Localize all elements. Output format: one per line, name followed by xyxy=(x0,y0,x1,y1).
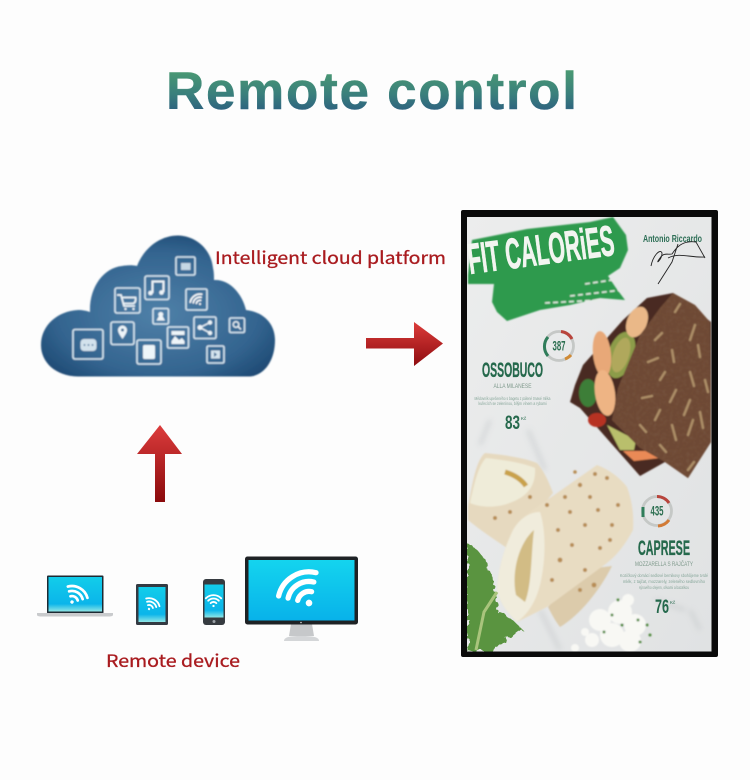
dish: Ossobuco: Mědovník upečeného s bagetu z pálené tmavé mlíka xyxy=(474,396,551,401)
dish: Ossobuco xyxy=(474,359,551,434)
marble background xyxy=(467,217,712,652)
signature xyxy=(651,242,705,284)
gauge: 435: 435 xyxy=(650,502,664,518)
dish: Caprese xyxy=(620,537,708,618)
icon: phone xyxy=(203,579,225,625)
dish: Ossobuco: Kč xyxy=(521,416,527,421)
icon: chat xyxy=(73,330,103,359)
filling xyxy=(579,303,660,461)
icon: monitor xyxy=(245,556,358,641)
title: Remote control xyxy=(166,62,577,121)
icon: calendar xyxy=(176,257,195,275)
icon: search xyxy=(230,318,244,332)
lower tortilla xyxy=(548,566,612,627)
panel: digital signage display xyxy=(461,210,718,657)
food: wraps xyxy=(468,453,633,627)
gauge: 435 xyxy=(642,496,672,526)
icon: shopping cart xyxy=(115,288,140,313)
dish: Caprese: sýrového olejem, olivami a bazalkou xyxy=(639,585,689,590)
arrow: devices to cloud xyxy=(137,425,182,502)
back wrap xyxy=(468,453,553,550)
front wrap xyxy=(497,465,633,622)
icon: laptop xyxy=(37,576,113,616)
gauge: 387: 387 xyxy=(552,338,566,354)
icon: person xyxy=(153,308,168,324)
food: dill xyxy=(467,543,521,651)
dish: Ossobuco: OSSOBUCO xyxy=(482,359,543,382)
icon: tablet xyxy=(136,584,168,625)
dish: Ossobuco: ALLA MILANESE xyxy=(494,383,532,390)
top slice xyxy=(612,293,711,478)
arrow: cloud to display xyxy=(366,322,443,366)
icon: picture xyxy=(168,327,188,348)
gauge: 387 xyxy=(544,332,574,360)
dish: Caprese: 76 xyxy=(655,597,669,618)
icon: share xyxy=(194,317,216,338)
dish: Ossobuco: 83 xyxy=(505,413,520,434)
icon: video xyxy=(207,346,224,363)
devices label: Remote device xyxy=(106,647,240,672)
icon: wifi signal xyxy=(186,289,207,310)
icon: music note xyxy=(145,276,169,300)
green brush stroke xyxy=(468,217,628,321)
icon: location pin xyxy=(111,322,134,344)
dish: Ossobuco: kuřecích se zelenínou, bílým vínem a rybami xyxy=(478,401,546,406)
food: sandwich xyxy=(570,293,711,478)
icon: document xyxy=(137,340,161,364)
icon: cloud with app icons xyxy=(41,236,275,376)
food: cottage cheese xyxy=(571,594,652,652)
bottom slice xyxy=(570,293,711,478)
dish: Caprese: Kč xyxy=(670,600,676,605)
cloud label: Intelligent cloud platform xyxy=(215,244,446,269)
devices group xyxy=(37,556,358,641)
